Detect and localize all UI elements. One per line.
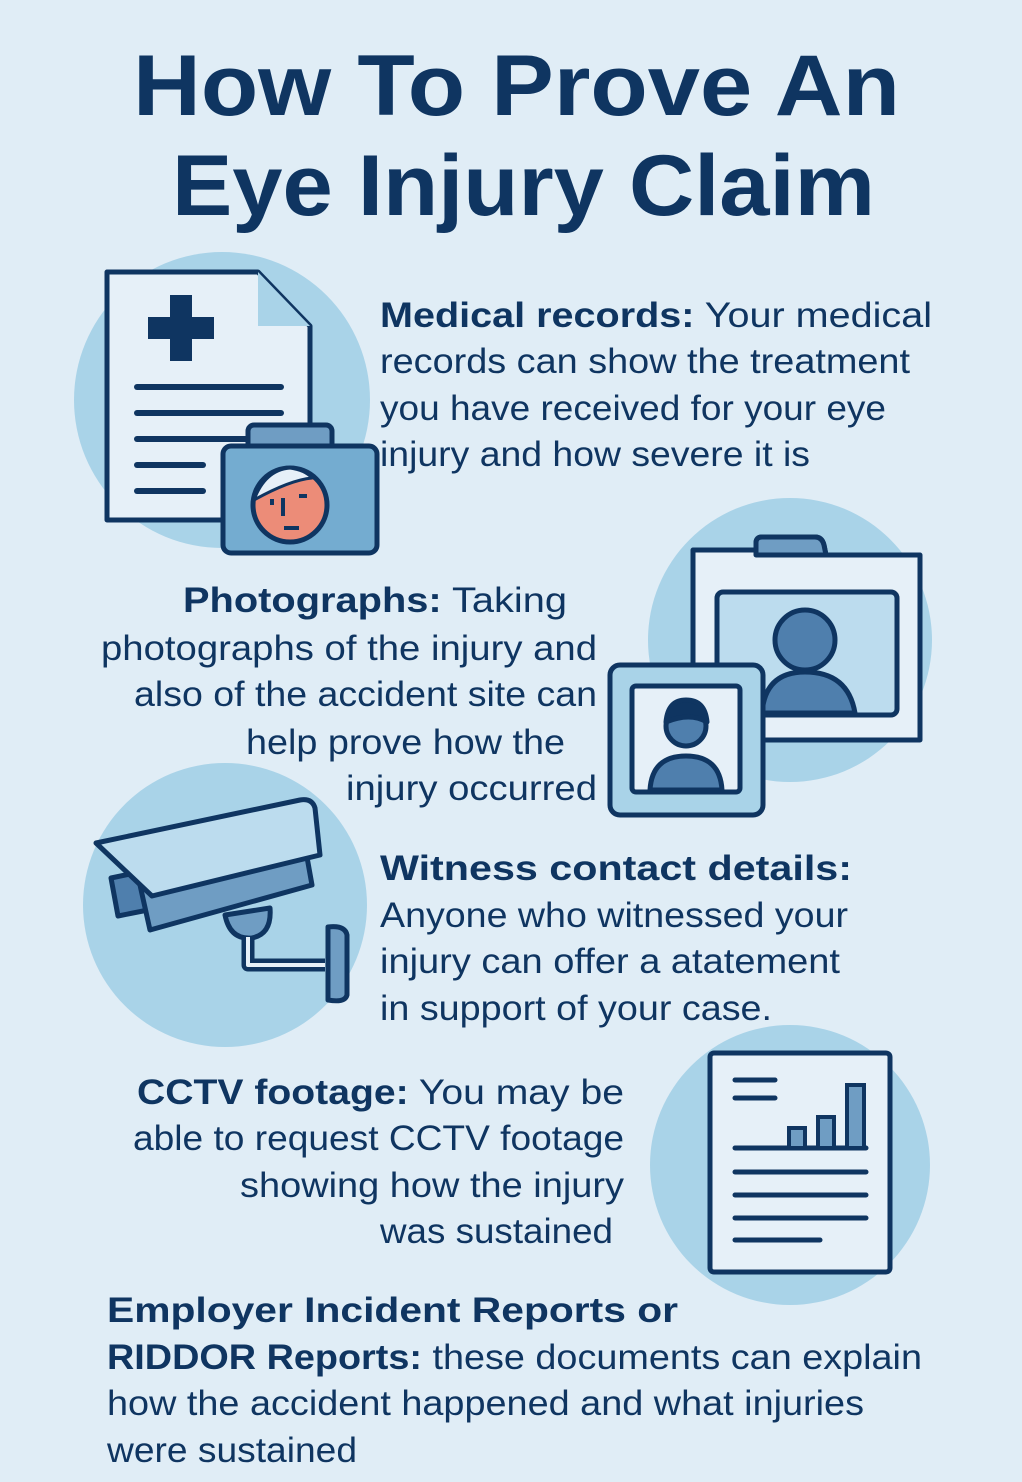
text: able to request CCTV footage bbox=[133, 1119, 624, 1158]
text: RIDDOR Reports: these documents can explain bbox=[107, 1338, 922, 1377]
text: was sustained bbox=[379, 1212, 613, 1251]
text: witness contact details: Witness contact details: bbox=[380, 849, 852, 888]
title: Eye Injury Claim bbox=[172, 138, 875, 234]
text: injury can offer a atatement bbox=[380, 942, 840, 981]
title: How To Prove An bbox=[133, 38, 900, 134]
text: showing how the injury bbox=[240, 1166, 625, 1205]
text: photographs of the injury and bbox=[101, 629, 597, 668]
text: were sustained bbox=[106, 1431, 357, 1470]
text: records can show the treatment bbox=[380, 342, 910, 381]
icon: cctv camera bbox=[83, 763, 367, 1047]
text: medical records: Medical records: Your medical bbox=[380, 296, 932, 335]
text: how the accident happened and what injuries bbox=[107, 1384, 864, 1423]
text: in support of your case. bbox=[380, 989, 772, 1028]
text: Anyone who witnessed your bbox=[380, 896, 848, 935]
text: you have received for your eye bbox=[380, 389, 886, 428]
text: injury occurred bbox=[346, 769, 597, 808]
icon: report document bbox=[650, 1025, 930, 1305]
icon: medical record with camera bbox=[74, 252, 377, 553]
text: cctv footage: CCTV footage: You may be bbox=[137, 1073, 624, 1112]
icon: photographs bbox=[610, 498, 932, 815]
text: employer incident reports: Employer Incident Reports or bbox=[107, 1291, 678, 1330]
text: help prove how the bbox=[246, 723, 565, 762]
text: injury and how severe it is bbox=[380, 435, 810, 474]
text: also of the accident site can bbox=[134, 675, 597, 714]
text: photographs: Photographs: Taking bbox=[183, 581, 567, 620]
title bbox=[133, 38, 900, 234]
